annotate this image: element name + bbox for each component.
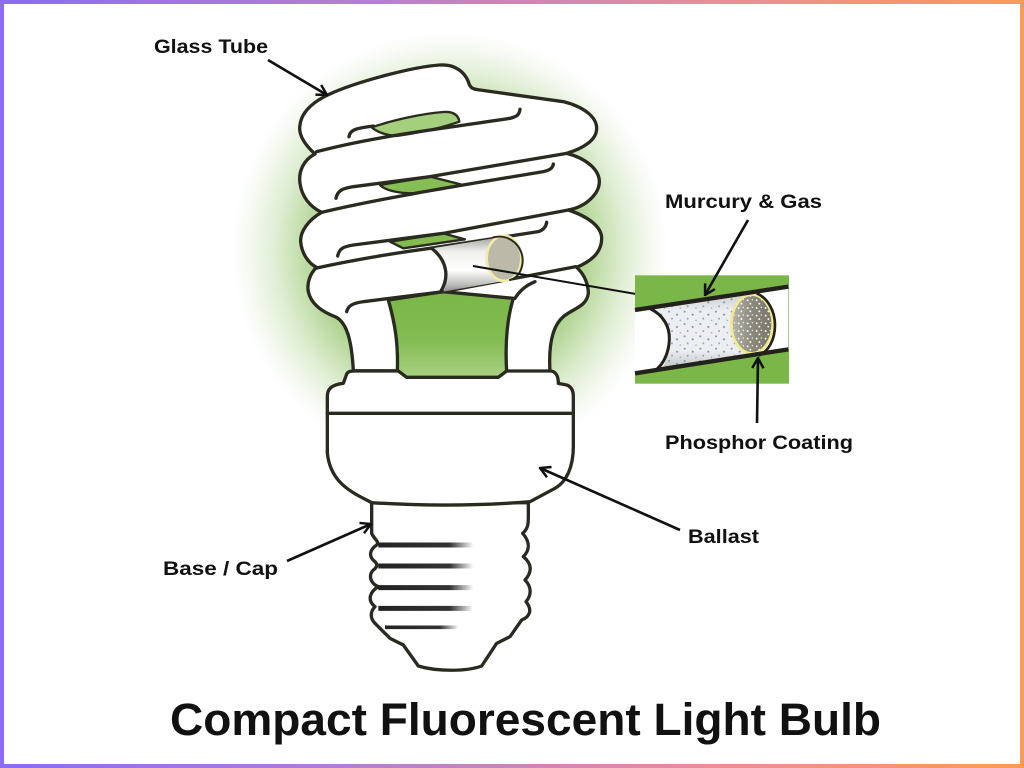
- tube outer arc: [757, 293, 775, 356]
- title: Compact Fluorescent Light Bulb: [170, 694, 881, 745]
- phosphor coating end: [731, 295, 773, 353]
- mercury and gas interior: [650, 293, 774, 369]
- screw thread lines: [378, 545, 473, 627]
- green window one: [372, 112, 459, 136]
- arrow: glass tube: [268, 60, 327, 95]
- inset tube band: [635, 287, 788, 373]
- label: ballast: Ballast: [688, 527, 760, 548]
- ballast housing: [327, 371, 573, 505]
- tube cut end: [650, 309, 669, 369]
- label: base cap: Base / Cap: [163, 559, 278, 580]
- ballast seam: [327, 408, 573, 418]
- label: murcury and gas: Murcury & Gas: [665, 192, 822, 213]
- tube silhouette: [300, 65, 602, 372]
- label: glass tube: Glass Tube: [154, 37, 268, 58]
- arrow: mercury and gas: [705, 220, 748, 295]
- cutaway of tube: [432, 236, 523, 292]
- inset green background: [635, 275, 789, 384]
- arrow: base cap: [287, 524, 371, 561]
- inset: tube cross-section: [635, 275, 789, 384]
- centre green gap: [388, 292, 513, 378]
- arrow: ballast: [540, 468, 680, 530]
- bulb: glass tube spiral: [300, 65, 602, 378]
- green window two: [380, 177, 463, 193]
- bulb: ballast housing and screw base: [327, 371, 573, 670]
- green window three: [390, 233, 465, 248]
- label: phosphor coating: Phosphor Coating: [665, 433, 853, 454]
- pointer line from tube to inset: [473, 266, 636, 294]
- screw base: [370, 503, 530, 670]
- tube edge lines: [315, 109, 576, 312]
- arrow: phosphor coating: [757, 358, 758, 423]
- tube edges: [635, 287, 788, 373]
- green glow behind bulb: [232, 32, 668, 468]
